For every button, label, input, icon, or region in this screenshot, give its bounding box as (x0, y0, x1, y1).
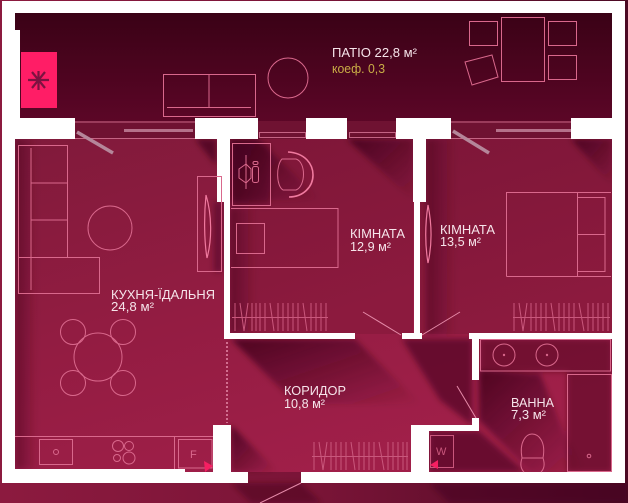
room 2 furniture (426, 192, 611, 276)
heading: bathroom label: ВАННА (511, 396, 555, 410)
heading: corridor label (284, 384, 346, 411)
cast shadows (15, 139, 628, 503)
heading: room 1 label: 12,9 м² (350, 240, 391, 254)
heading: room 1 label (350, 227, 406, 254)
heading: kitchen label: 24,8 м² (111, 300, 154, 314)
heading: bathroom label (511, 396, 555, 422)
icon: washer marker (430, 436, 454, 469)
kitchen-dining furniture (15, 146, 222, 469)
bathroom fixtures (480, 340, 612, 472)
apartment floor (15, 121, 612, 472)
heading: corridor label: 10,8 м² (284, 397, 325, 411)
patio furniture (164, 18, 576, 116)
icon: fridge marker (190, 449, 213, 472)
heading: patio label: ПАТІО 22,8 м² (332, 46, 417, 60)
patio floor (15, 13, 612, 123)
heading: kitchen label (111, 288, 215, 314)
icon: washer marker: W (436, 446, 447, 458)
heading: patio label (332, 46, 417, 76)
heading: bathroom label: 7,3 м² (511, 408, 546, 422)
room 1 furniture (231, 144, 338, 268)
interior doors (260, 312, 476, 503)
windows and doors to patio (75, 122, 571, 153)
heading: patio label: коеф. 0,3 (332, 62, 385, 76)
kitchen to corridor divider (226, 342, 228, 423)
heading: room 1 label: КІМНАТА (350, 227, 406, 241)
icon: fridge marker: F (190, 449, 197, 461)
icon: pink asterisk tile (21, 52, 57, 108)
heading: room 2 label: КІМНАТА (440, 223, 496, 237)
heading: room 2 label: 13,5 м² (440, 235, 481, 249)
heading: corridor label: КОРИДОР (284, 384, 346, 398)
heading: room 2 label (440, 223, 496, 249)
heading: kitchen label: КУХНЯ-ЇДАЛЬНЯ (111, 288, 215, 302)
wardrobes (232, 303, 610, 470)
